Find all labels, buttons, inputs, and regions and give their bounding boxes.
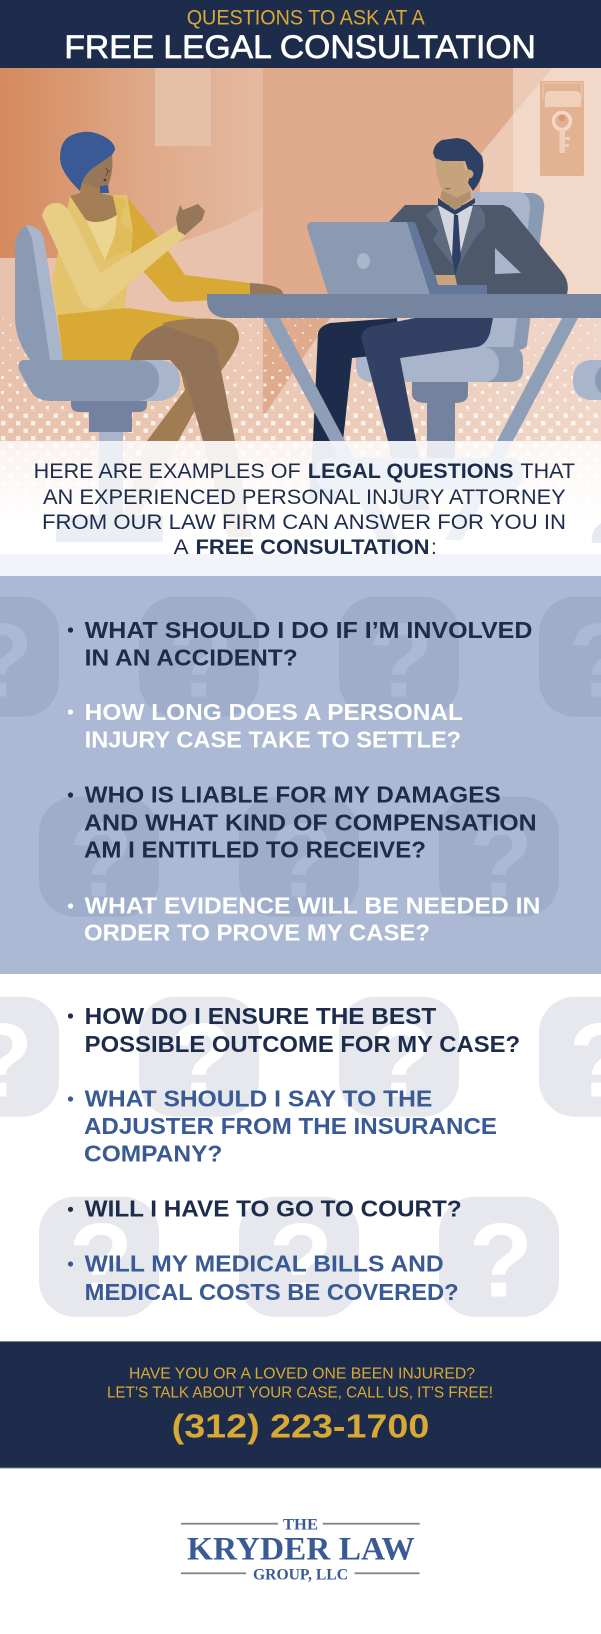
woman's chair bbox=[15, 225, 180, 442]
call to action band bbox=[0, 1341, 601, 1468]
logo bbox=[181, 1516, 420, 1583]
hair bbox=[433, 138, 483, 191]
question 3 bbox=[68, 781, 537, 863]
question 5: POSSIBLE OUTCOME FOR MY CASE? bbox=[85, 1031, 520, 1057]
header banner bbox=[0, 0, 601, 68]
face bbox=[435, 158, 470, 198]
office background bbox=[0, 68, 601, 560]
question 4 bbox=[68, 893, 540, 946]
question 1 bbox=[68, 617, 532, 670]
question tiles: ? bbox=[369, 1003, 433, 1120]
intro text: FROM OUR LAW FIRM CAN ANSWER FOR YOU IN bbox=[42, 511, 566, 534]
near leg bbox=[130, 325, 235, 441]
question 4: ORDER TO PROVE MY CASE? bbox=[84, 920, 430, 946]
question tiles bbox=[0, 997, 601, 1320]
question tiles: ? bbox=[469, 803, 533, 920]
intro text: LEGAL QUESTIONS bbox=[308, 460, 514, 483]
man's chair bbox=[356, 192, 544, 441]
face bbox=[82, 155, 112, 188]
question 6: ADJUSTER FROM THE INSURANCE bbox=[84, 1113, 497, 1139]
intro text bbox=[34, 460, 575, 559]
panel: blue questions bbox=[0, 576, 601, 974]
question 6 bbox=[68, 1086, 497, 1167]
question tiles: ? bbox=[169, 1003, 233, 1120]
main title: FREE LEGAL CONSULTATION bbox=[64, 29, 536, 65]
logo: GROUP, LLC bbox=[253, 1566, 348, 1583]
man bbox=[313, 138, 568, 441]
suit bbox=[388, 205, 568, 294]
hand on table bbox=[250, 283, 283, 294]
icon: key tag bbox=[540, 81, 584, 176]
question tiles: ? bbox=[469, 1203, 533, 1320]
hair tip bbox=[100, 185, 109, 193]
question 5 bbox=[68, 1003, 520, 1057]
mouth bbox=[444, 188, 451, 190]
question 8: WILL MY MEDICAL BILLS AND bbox=[85, 1251, 444, 1277]
head wrap bbox=[60, 132, 115, 191]
ear bbox=[466, 170, 474, 178]
question tiles: ? bbox=[69, 1203, 133, 1320]
intro text: AN EXPERIENCED PERSONAL INJURY ATTORNEY bbox=[43, 486, 566, 509]
question tiles: ? bbox=[369, 603, 433, 720]
blouse bbox=[86, 215, 117, 260]
tie bbox=[452, 215, 461, 275]
near leg bbox=[361, 318, 493, 441]
woman bbox=[42, 132, 283, 441]
question 3: WHO IS LIABLE FOR MY DAMAGES bbox=[85, 781, 501, 807]
question 1: IN AN ACCIDENT? bbox=[85, 644, 298, 670]
header kicker: QUESTIONS TO ASK AT A bbox=[187, 7, 425, 30]
far right chair bbox=[573, 360, 601, 400]
question 3: AM I ENTITLED TO RECEIVE? bbox=[84, 837, 426, 863]
question tiles: ? bbox=[269, 803, 333, 920]
question 8 bbox=[68, 1251, 459, 1305]
panel: white questions bbox=[0, 974, 601, 1341]
question 6: WHAT SHOULD I SAY TO THE bbox=[85, 1086, 432, 1112]
intro panel bbox=[0, 441, 601, 576]
logo: KRYDER LAW bbox=[187, 1531, 415, 1567]
lapel bbox=[105, 196, 133, 260]
logo: THE bbox=[283, 1516, 318, 1534]
office illustration bbox=[15, 81, 601, 442]
phone number: (312) 223-1700 bbox=[172, 1407, 429, 1444]
question 3: AND WHAT KIND OF COMPENSATION bbox=[84, 810, 537, 836]
question 2: INJURY CASE TAKE TO SETTLE? bbox=[85, 727, 461, 753]
question 4: WHAT EVIDENCE WILL BE NEEDED IN bbox=[85, 893, 540, 919]
question 7: WILL I HAVE TO GO TO COURT? bbox=[85, 1196, 462, 1222]
cta line 2: LET’S TALK ABOUT YOUR CASE, CALL US, IT’S FREE! bbox=[107, 1384, 493, 1401]
question 2 bbox=[68, 699, 463, 753]
question 1: WHAT SHOULD I DO IF I’M INVOLVED bbox=[85, 617, 532, 643]
laptop bbox=[307, 222, 487, 294]
intro text: FREE CONSULTATION bbox=[196, 536, 430, 559]
far leg bbox=[147, 319, 239, 441]
eye and mouth bbox=[106, 168, 110, 176]
hand raised bbox=[176, 204, 205, 235]
cta line 1: HAVE YOU OR A LOVED ONE BEEN INJURED? bbox=[129, 1365, 475, 1382]
near arm bbox=[42, 203, 185, 309]
question 6: COMPANY? bbox=[84, 1141, 222, 1167]
question 5: HOW DO I ENSURE THE BEST bbox=[85, 1003, 437, 1029]
far arm bbox=[123, 198, 250, 302]
lapels bbox=[425, 206, 455, 268]
question tiles bbox=[0, 597, 601, 920]
torso jacket bbox=[52, 195, 133, 315]
table top bbox=[207, 294, 601, 318]
faded watermark of furniture bbox=[56, 441, 601, 555]
intro text: THAT bbox=[520, 460, 575, 483]
intro text: HERE ARE EXAMPLES OF bbox=[34, 460, 301, 483]
far leg bbox=[313, 318, 400, 441]
intro text: A bbox=[174, 536, 189, 559]
question tiles: ? bbox=[169, 603, 233, 720]
question 8: MEDICAL COSTS BE COVERED? bbox=[85, 1279, 459, 1305]
question tiles: ? bbox=[69, 803, 133, 920]
arm gap showing chair bbox=[495, 248, 521, 274]
intro text: : bbox=[431, 536, 437, 559]
neck bbox=[70, 183, 117, 222]
collar bbox=[438, 198, 475, 215]
neck bbox=[440, 190, 471, 210]
question 2: HOW LONG DOES A PERSONAL bbox=[85, 699, 463, 725]
skirt bbox=[57, 308, 195, 360]
table legs bbox=[263, 318, 578, 441]
shirt bbox=[438, 206, 473, 257]
question tiles: ? bbox=[269, 1203, 333, 1320]
